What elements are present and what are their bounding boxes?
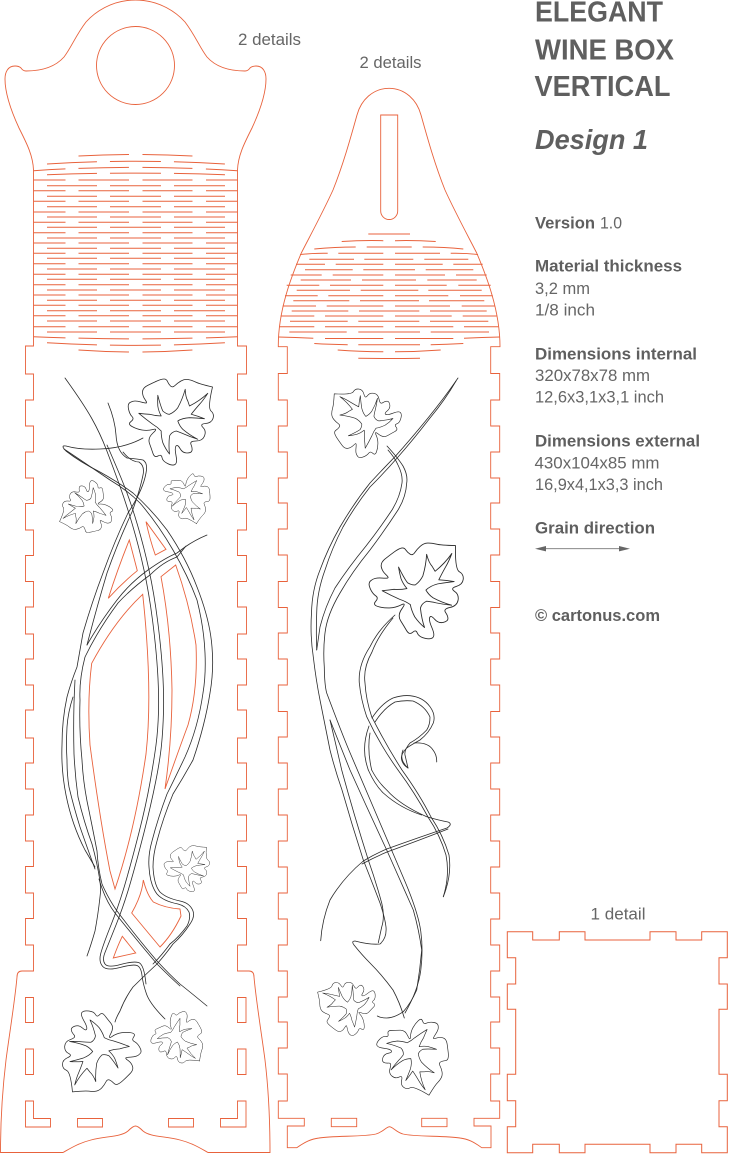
- spec: dimensions external: 16,9x4,1x3,3 inch: [535, 476, 663, 494]
- art nouveau vine strands: [62, 378, 213, 1022]
- spec: material thickness: 3,2 mm: [535, 280, 590, 298]
- neck slot: [381, 115, 398, 220]
- bottom slots: [26, 998, 246, 1127]
- bottom slots: [331, 1118, 447, 1127]
- spec: dimensions internal: 320x78x78 mm: [535, 367, 650, 385]
- subtitle: Design 1: [535, 124, 648, 155]
- copyright: © cartonus.com: [535, 607, 660, 625]
- spec: dimensions internal: 12,6x3,1x3,1 inch: [535, 389, 664, 407]
- label: 1 detail: 1 detail: [590, 906, 646, 924]
- title: VERTICAL: [534, 71, 670, 103]
- panel: left box side, 2 details: [0, 0, 270, 1152]
- grape leaves, middle panel: [313, 382, 474, 1098]
- red cut-outs in ornament: [89, 522, 196, 958]
- spec: version: 1.0: [600, 214, 622, 232]
- living hinge slats: [278, 234, 500, 359]
- spec: version: Version: [535, 214, 595, 232]
- spec: material thickness: [535, 258, 682, 320]
- spec: material thickness: Material thickness: [535, 258, 682, 276]
- handle hole: [96, 26, 174, 104]
- spec: dimensions internal: Dimensions internal: [535, 345, 697, 363]
- living hinge slats: [34, 154, 238, 352]
- panel: middle box side, 2 details: [278, 88, 500, 1148]
- spec: dimensions external: Dimensions external: [535, 433, 700, 451]
- label: 2 details middle: 2 details: [360, 54, 422, 72]
- spec: material thickness: 1/8 inch: [535, 302, 595, 320]
- middle panel outline with finger joints: [278, 88, 500, 1148]
- grape leaves, left panel: [48, 379, 216, 1099]
- panel: square box end, 1 detail: [507, 932, 727, 1153]
- spec: dimensions internal: [535, 345, 697, 407]
- spec: dimensions external: [534, 433, 700, 494]
- arrow: grain direction: [535, 546, 630, 551]
- spec: dimensions external: 430x104x85 mm: [534, 454, 660, 472]
- art nouveau vine strands: [311, 378, 458, 1018]
- spec: grain direction: Grain direction: [535, 519, 655, 537]
- title: WINE BOX: [535, 34, 675, 66]
- title: [534, 0, 675, 103]
- left panel outline with finger joints: [0, 0, 270, 1152]
- spec: version: [535, 214, 622, 232]
- label: 2 details left: 2 details: [238, 31, 301, 49]
